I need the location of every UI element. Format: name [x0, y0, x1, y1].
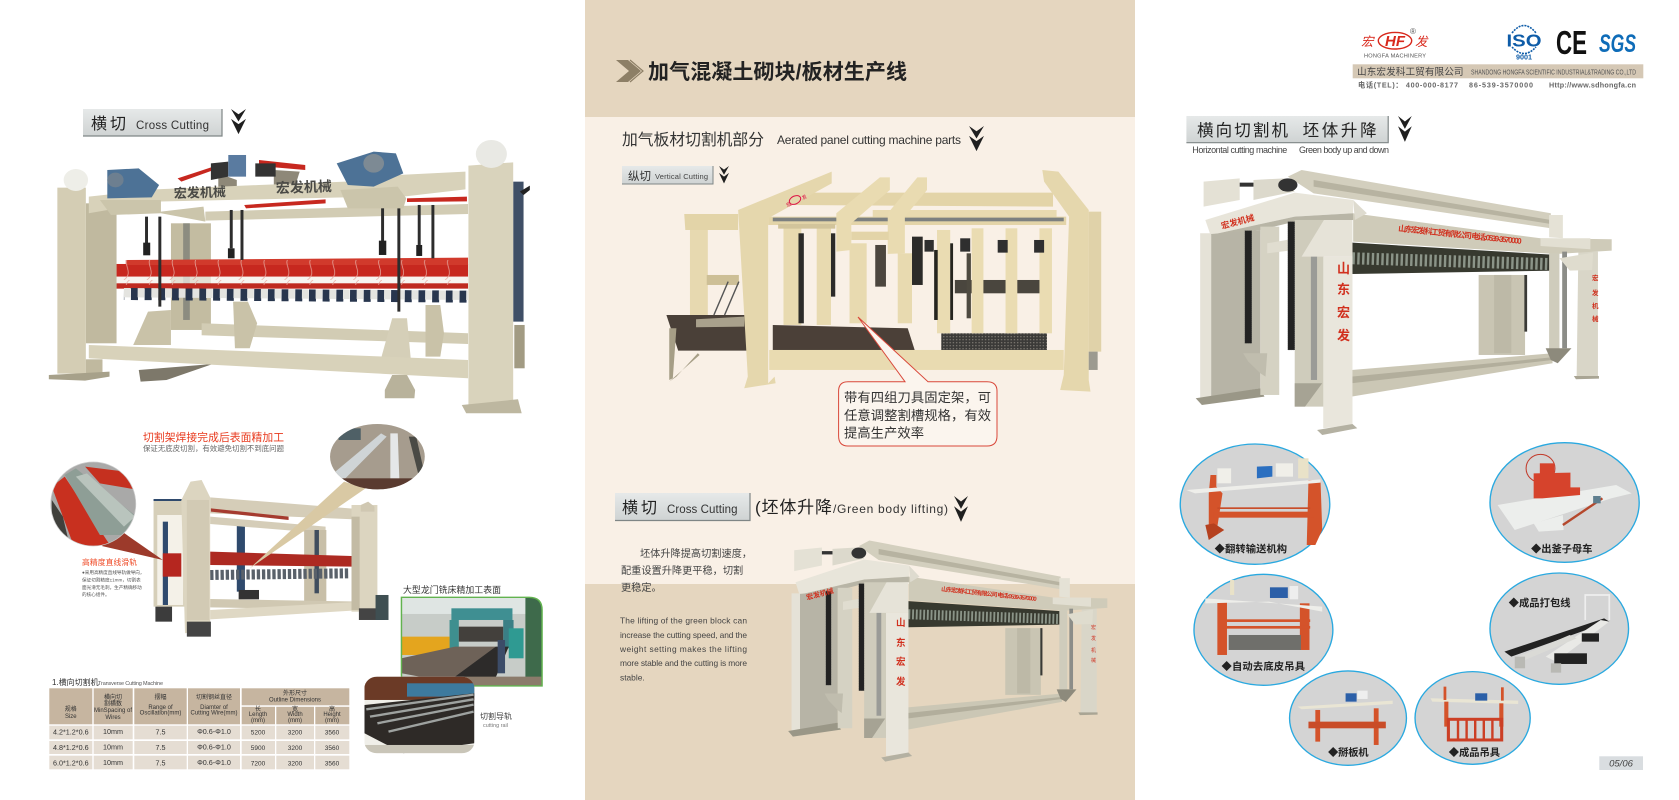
company bar	[1353, 64, 1643, 78]
table: transverse cutting machine specifications: 7.5	[156, 728, 166, 736]
heading: horizontal cutting machine	[1186, 116, 1412, 155]
table: transverse cutting machine specifications: 4.8*1.2*0.6	[53, 743, 89, 752]
text: lifting description: The lifting of the green block can	[620, 616, 747, 626]
heading: horizontal cutting machine: Horizontal cutting machine	[1192, 145, 1287, 155]
table: transverse cutting machine specifications: 4.2*1.2*0.6	[53, 728, 89, 736]
logo: Hongfa	[1361, 27, 1429, 60]
machine: centre green body lifting cutter	[788, 541, 1107, 762]
table: transverse cutting machine specifications: Range of	[148, 705, 173, 711]
table: transverse cutting machine specifications: Diamter of	[200, 705, 228, 711]
machine: centre green body lifting cutter: 发	[1091, 635, 1096, 642]
text: lifting description: 坯体升降提高切割速度，	[640, 547, 752, 560]
machine: centre green body lifting cutter: 山东宏发科工贸有限公司 电话:0539-3570000	[941, 585, 1038, 603]
certification marks: ISO, CE, SGS	[1506, 24, 1636, 62]
machine: right green body lifting cutter	[1196, 170, 1612, 435]
heading: horizontal cutting machine: 坯体升降	[1303, 121, 1377, 140]
text: linear guide note: ●采用高精度直线导轨做导向，	[82, 569, 144, 576]
title: production line: 加气混凝土砌块/板材生产线	[648, 61, 907, 84]
equipment circle: tilting conveyor	[1180, 444, 1330, 564]
table: transverse cutting machine specifications: 割横数	[104, 700, 122, 708]
machine: right green body lifting cutter: 械	[1592, 314, 1599, 323]
table: transverse cutting machine specifications: 6.0*1.2*0.6	[53, 758, 89, 768]
logo: Hongfa: 发	[1415, 35, 1429, 49]
table: transverse cutting machine specifications: Φ0.6-Φ1.0	[197, 727, 231, 736]
table: transverse cutting machine specifications: 3560	[325, 760, 340, 768]
text: lifting description: 更稳定。	[621, 581, 662, 594]
equipment circle: panel breaking machine	[1290, 671, 1406, 765]
table: transverse cutting machine specifications: Height	[323, 712, 341, 718]
equipment circle: bottom skin removal spreader: ◆自动去底皮吊具	[1222, 660, 1306, 673]
circle outlines	[51, 462, 136, 546]
table: transverse cutting machine specifications	[49, 677, 349, 769]
table: transverse cutting machine specifications: 3200	[288, 760, 303, 768]
contact line: 86-539-3570000	[1469, 80, 1533, 89]
heading: vertical cutting label: Vertical Cutting	[655, 172, 708, 181]
heading: left cross cutting label: Cross Cutting	[136, 120, 209, 132]
certification marks: ISO, CE, SGS: ISO	[1506, 30, 1542, 50]
equipment circle: panel breaking machine: ◆掰板机	[1328, 746, 1369, 759]
equipment circle: kiln car ferry	[1490, 443, 1639, 562]
table: transverse cutting machine specifications: Width	[287, 712, 303, 718]
table: transverse cutting machine specifications: 切割钢丝直径	[196, 693, 232, 701]
equipment circle: finished product spreader	[1415, 672, 1530, 764]
heading: cross cutting green body lifting: /Green body lifting)	[833, 502, 948, 516]
text: lifting description: stable.	[620, 672, 645, 682]
table: transverse cutting machine specifications: Length	[249, 712, 267, 718]
equipment circle: finished product spreader: ◆成品吊具	[1449, 746, 1501, 759]
machine: centre green body lifting cutter: 宏	[896, 656, 906, 668]
logo: Hongfa: ®	[1410, 27, 1416, 36]
machine text: brand marks on beam: 宏发机械	[174, 184, 226, 201]
table: transverse cutting machine specifications: 高	[329, 705, 335, 713]
equipment circle: finished packing line: ◆成品打包线	[1509, 597, 1571, 610]
table: transverse cutting machine specifications: (mm)	[288, 718, 302, 724]
table: transverse cutting machine specifications: 7.5	[156, 758, 166, 768]
heading: left cross cutting label	[83, 109, 246, 136]
table: transverse cutting machine specifications: Φ0.6-Φ1.0	[197, 758, 231, 767]
machine: right green body lifting cutter: 东	[1337, 282, 1350, 297]
callout: four groups of cutter holders: 提高生产效率	[844, 424, 924, 440]
table: transverse cutting machine specifications: 3560	[325, 745, 340, 752]
table: transverse cutting machine specifications: (mm)	[325, 718, 339, 724]
detail circle: linear guide rail	[51, 462, 136, 546]
heading: aerated panel cutting machine parts: 加气板材切割机部分	[622, 131, 764, 149]
machine: centre green body lifting cutter: 东	[896, 637, 906, 649]
heading: vertical cutting label	[622, 166, 729, 184]
machine: right green body lifting cutter: 发	[1592, 288, 1599, 297]
table: transverse cutting machine specifications: 宽	[292, 705, 298, 713]
heading: cross cutting green body lifting: Cross Cutting	[667, 504, 738, 516]
heading: frame finishing note: 切割架焊接完成后表面精加工	[143, 430, 284, 444]
heading: frame finishing note: 保证无底皮切割，有效避免切割不到底问题	[143, 444, 285, 453]
text: lifting description: weight setting makes the lifting	[619, 644, 747, 654]
logo: Hongfa: HF	[1385, 33, 1406, 50]
table: transverse cutting machine specifications: 7.5	[156, 743, 166, 752]
machine: small cutting frame diagram	[154, 480, 388, 637]
table: transverse cutting machine specifications: Φ0.6-Φ1.0	[197, 742, 231, 752]
certification marks: ISO, CE, SGS: CE	[1556, 24, 1587, 61]
text: linear guide note: 保证切割精度±1mm，切割表	[82, 576, 141, 584]
page number	[1599, 756, 1643, 770]
heading: horizontal cutting machine: 横向切割机	[1197, 121, 1288, 140]
heading: cross cutting green body lifting	[615, 493, 968, 522]
table: transverse cutting machine specifications: Outline Dimensions	[269, 698, 321, 704]
table: transverse cutting machine specifications: Transverse Cutting Machine	[98, 681, 163, 687]
contact line: 电话(TEL)： 400-000-8177	[1358, 80, 1458, 89]
table: transverse cutting machine specifications: MinSpacing of	[94, 708, 132, 714]
machine: centre green body lifting cutter: 机	[1091, 647, 1096, 654]
table: transverse cutting machine specifications: 1.横向切割机	[52, 677, 99, 687]
table: transverse cutting machine specifications: Wires	[105, 715, 121, 721]
photo: gantry milling machine	[401, 584, 542, 686]
table: transverse cutting machine specifications: Oscillation(mm)	[140, 710, 181, 716]
red brand mark on frame: 发	[800, 193, 808, 202]
photo: cutting guide rail: cutting rail	[483, 723, 508, 729]
logo: Hongfa: 宏	[1361, 35, 1375, 49]
table: transverse cutting machine specifications: 10mm	[103, 727, 123, 736]
table: transverse cutting machine specifications: 3200	[288, 745, 303, 752]
machine: centre green body lifting cutter: 械	[1091, 657, 1096, 664]
certification marks: ISO, CE, SGS: SGS	[1599, 30, 1636, 58]
heading: aerated panel cutting machine parts	[622, 126, 984, 151]
equipment circle: kiln car ferry: ◆出釜子母车	[1531, 542, 1592, 555]
machine: right green body lifting cutter: 山东宏发科工贸有限公司 电话:0539-3570000	[1398, 223, 1523, 246]
machine: right green body lifting cutter: 山	[1337, 261, 1350, 276]
machine: right green body lifting cutter: 宏	[1337, 305, 1350, 320]
text: lifting description: increase the cutting speed, and the	[620, 630, 747, 640]
table: transverse cutting machine specifications: 5900	[251, 745, 266, 752]
machine: centre green body lifting cutter: 宏	[1091, 624, 1096, 631]
machine: right green body lifting cutter: 宏	[1592, 273, 1599, 282]
text: linear guide note	[82, 557, 144, 598]
table: transverse cutting machine specifications: 7200	[251, 760, 266, 768]
panel: centre column background	[585, 0, 1135, 800]
equipment circle: tilting conveyor: ◆翻转输送机构	[1215, 542, 1287, 555]
red brand mark on frame: 宏	[785, 200, 793, 209]
equipment circle: bottom skin removal spreader	[1194, 574, 1333, 685]
table: transverse cutting machine specifications: Cutting Wire(mm)	[190, 710, 238, 716]
certification marks: ISO, CE, SGS: 9001	[1516, 52, 1532, 62]
callout: four groups of cutter holders: 任意调整割槽规格，有效	[844, 407, 991, 423]
heading: frame finishing note	[143, 430, 285, 453]
machine: right green body lifting cutter: 发	[1337, 328, 1350, 343]
equipment circle: finished packing line	[1490, 573, 1629, 684]
heading: aerated panel cutting machine parts: Aerated panel cutting machine parts	[777, 133, 961, 147]
table: transverse cutting machine specifications: 长	[255, 705, 261, 713]
machine text: brand marks on beam: 宏发机械	[276, 178, 332, 196]
heading: vertical cutting label: 纵切	[628, 170, 651, 183]
table: transverse cutting machine specifications: 5200	[251, 730, 266, 736]
detail circle: machined rails	[329, 423, 426, 490]
heading: horizontal cutting machine: Green body up and down	[1299, 145, 1389, 155]
heading: cross cutting green body lifting: (坯体升降	[755, 498, 832, 517]
table: transverse cutting machine specifications: 3200	[288, 730, 303, 736]
machine: right green body lifting cutter: 机	[1592, 301, 1599, 310]
text: lifting description	[619, 547, 752, 682]
text: linear guide note: 高精度直线滑轨	[82, 557, 137, 567]
callout wedges to detail circles	[102, 482, 366, 568]
photo: cutting guide rail	[364, 677, 512, 753]
table: transverse cutting machine specifications: 3560	[325, 730, 340, 736]
machine text: brand marks on beam	[174, 178, 332, 201]
text: lifting description: 配重设置升降更平稳，切割	[621, 564, 743, 577]
table: transverse cutting machine specifications: 规格	[65, 705, 77, 713]
text: linear guide note: 的核心组件。	[82, 591, 110, 598]
table: transverse cutting machine specifications: 10mm	[103, 742, 123, 752]
machine: centre green body lifting cutter: 山	[896, 617, 906, 629]
text: lifting description: more stable and the cutting is more	[620, 658, 747, 668]
machine: right green body lifting cutter: 宏发机械	[1220, 212, 1256, 231]
machine: centre green body lifting cutter: 宏发机械	[805, 586, 835, 602]
table: transverse cutting machine specifications: (mm)	[251, 718, 265, 724]
contact line	[1358, 80, 1636, 89]
heading: left cross cutting label: 横切	[91, 115, 126, 133]
machine: centre green body lifting cutter: 发	[896, 676, 906, 688]
red brand mark on frame	[784, 191, 808, 209]
photo: gantry milling machine: 大型龙门铣床精加工表面	[403, 584, 501, 595]
table: transverse cutting machine specifications: 横向切	[104, 693, 122, 701]
page number: 05/06	[1609, 758, 1634, 770]
table: transverse cutting machine specifications: Size	[65, 714, 77, 720]
table: transverse cutting machine specifications: 10mm	[103, 758, 123, 767]
contact line: Http://www.sdhongfa.cn	[1549, 80, 1636, 89]
callout: four groups of cutter holders: 带有四组刀具固定架，可	[844, 390, 991, 405]
heading: cross cutting green body lifting: 横切	[622, 499, 657, 517]
machine: vertical cutting frame	[666, 170, 1101, 392]
text: linear guide note: 面光滑无毛刺，生产精确移动	[82, 584, 142, 591]
callout: four groups of cutter holders	[839, 317, 997, 446]
photo: cutting guide rail: 切割导轨	[480, 711, 512, 721]
logo: Hongfa: HONGFA MACHINERY	[1364, 54, 1426, 60]
machine: cross cutting photo	[49, 140, 530, 413]
company bar: 山东宏发科工贸有限公司	[1357, 66, 1464, 78]
table: transverse cutting machine specifications: 摆幅	[154, 693, 167, 701]
table: transverse cutting machine specifications: 外形尺寸	[283, 689, 307, 697]
